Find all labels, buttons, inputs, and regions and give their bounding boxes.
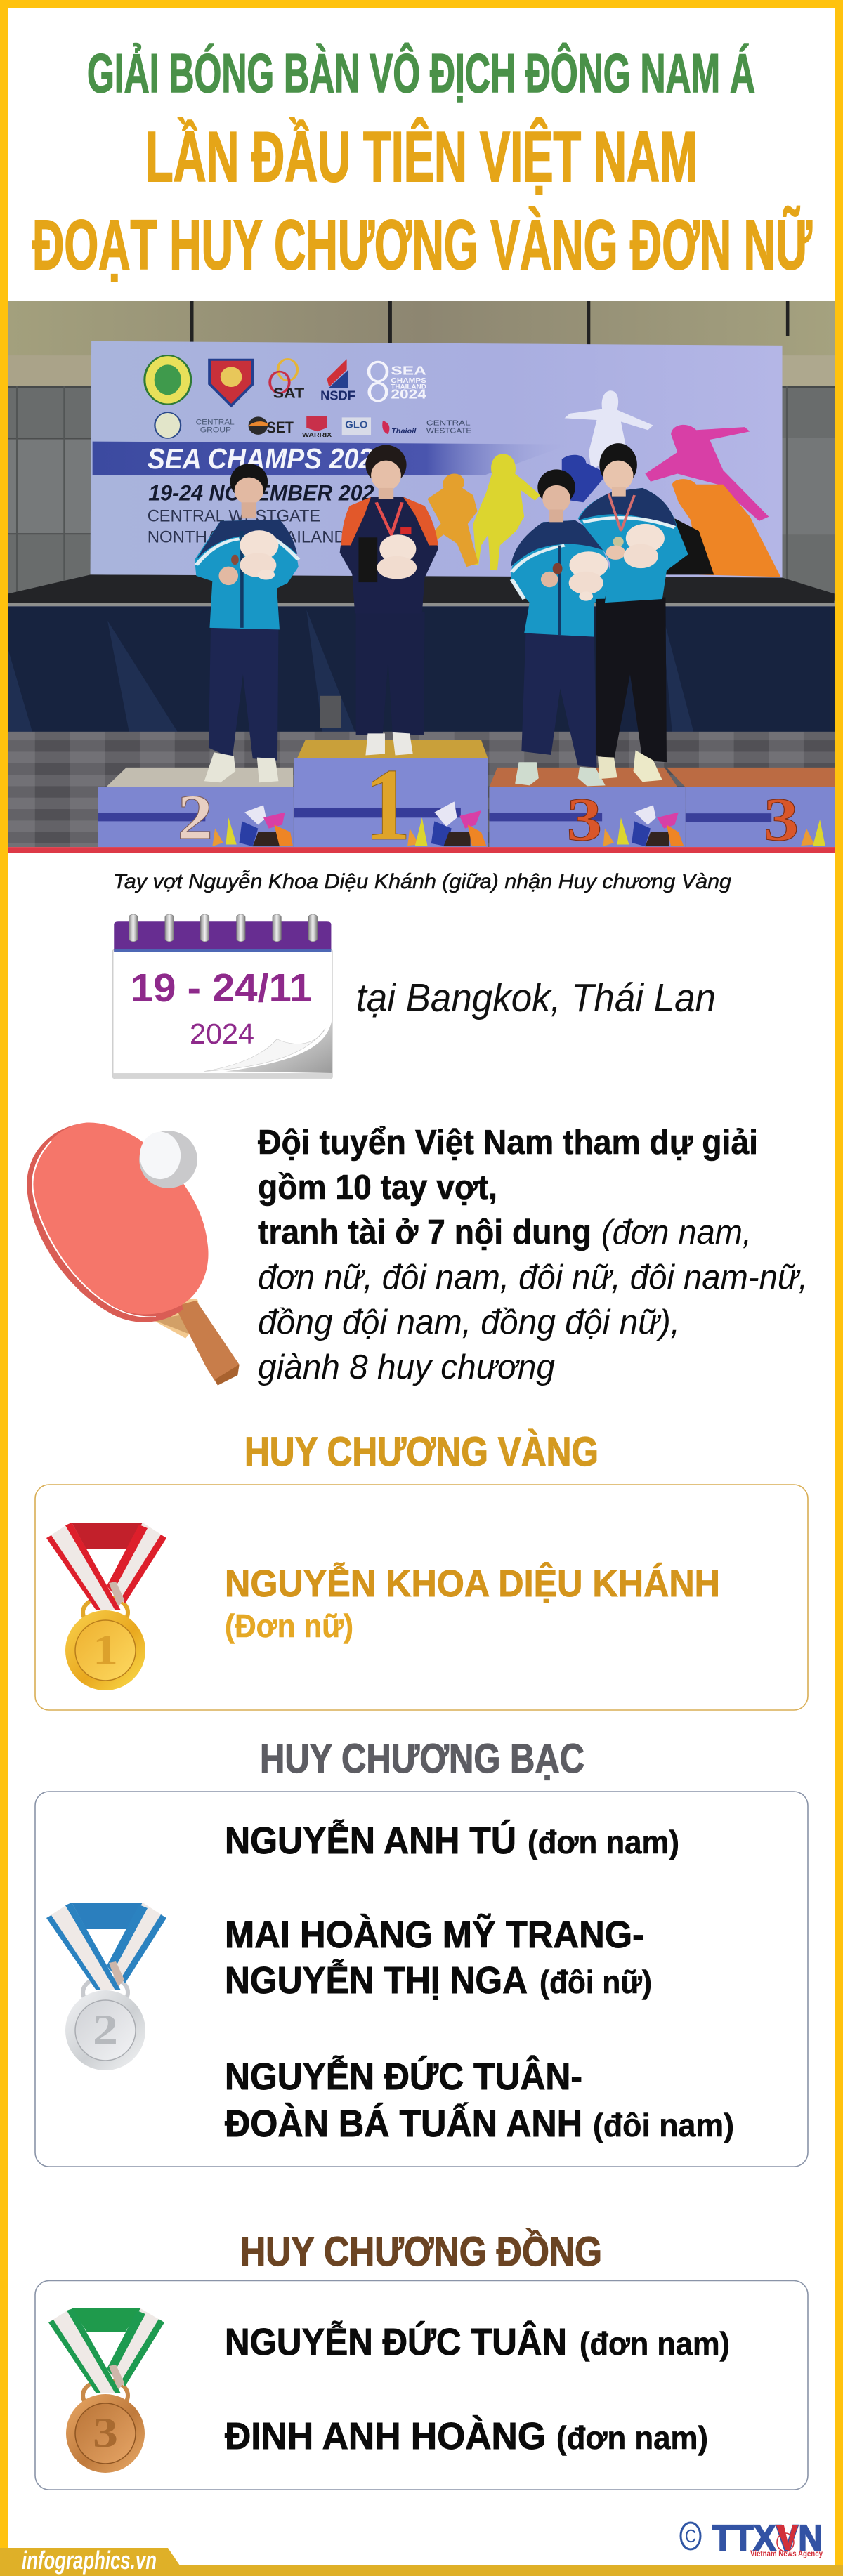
banner	[91, 341, 783, 578]
stage and curtain	[8, 574, 836, 732]
podium block 1: 1	[365, 747, 411, 862]
icon: gold medal: 1	[93, 1627, 118, 1673]
calendar icon	[113, 914, 332, 1079]
silver medalists: MAI HOÀNG MỸ TRANG-	[225, 1914, 644, 1956]
podium block 3: 3	[567, 785, 602, 854]
team description text: (đơn nam,	[601, 1214, 752, 1251]
podium block 3	[489, 768, 686, 854]
icon: gold medal	[46, 1523, 166, 1690]
podium block 2	[98, 768, 294, 853]
banner: GROUP	[200, 426, 231, 434]
banner: CENTRAL	[196, 418, 235, 427]
icon: bronze medal: 3	[93, 2410, 118, 2456]
title	[32, 42, 812, 284]
player: centre	[340, 445, 438, 756]
footer bar with site name	[0, 2546, 843, 2576]
team description text	[258, 1124, 808, 1386]
silver medalists: (đôi nam)	[593, 2107, 734, 2143]
silver medalists: (đôi nữ)	[540, 1964, 652, 2000]
wall and stage backdrop	[8, 300, 836, 601]
podium block 2: 2	[178, 782, 213, 853]
podium block 3 second	[667, 768, 836, 854]
silver medalists: ĐOÀN BÁ TUẤN ANH	[225, 2103, 582, 2145]
bronze medalists: NGUYỄN ĐỨC TUÂN	[225, 2320, 567, 2363]
player: right back	[578, 443, 688, 782]
silver medalists: (đơn nam)	[528, 1824, 679, 1860]
player: right front	[511, 469, 610, 786]
photo: podium ceremony	[8, 300, 836, 862]
heading: silver medal: HUY CHƯƠNG BẠC	[260, 1736, 584, 1782]
location text: tại Bangkok, Thái Lan	[356, 975, 716, 1020]
banner: WESTGATE	[426, 426, 471, 435]
floor	[8, 732, 836, 847]
icon: silver medal: 2	[93, 2006, 118, 2053]
banner: Thaioil	[391, 427, 417, 435]
banner: 19-24 NOVEMBER 202	[148, 480, 374, 506]
team description text: giành 8 huy chương	[258, 1348, 555, 1386]
banner: CENTRAL WESTGATE	[148, 506, 320, 525]
banner: GLO	[345, 419, 367, 431]
player: left	[195, 464, 299, 782]
banner: NSDF	[320, 388, 355, 402]
banner: CENTRAL	[426, 419, 471, 427]
silver medalists: NGUYỄN ANH TÚ	[225, 1819, 516, 1862]
team description text: đồng đội nam, đồng đội nữ),	[258, 1303, 680, 1341]
banner: 2024	[391, 387, 426, 401]
podium block 1	[294, 740, 488, 847]
banner: NONTHABURI THAILAND	[148, 527, 346, 546]
calendar icon: 19 - 24/11	[131, 966, 312, 1011]
banner: CHAMPS	[391, 376, 426, 384]
banner: SEA CHAMPS 202	[148, 443, 373, 475]
panel: bronze medal	[35, 2281, 808, 2490]
team description text: đơn nữ, đôi nam, đôi nữ, đôi nam-nữ,	[258, 1259, 808, 1296]
icon: bronze medal	[48, 2308, 164, 2473]
banner silhouettes	[426, 390, 780, 577]
team description text: tranh tài ở 7 nội dung	[258, 1214, 592, 1251]
silver medalists	[225, 1819, 734, 2145]
logo: TTXVN: TTXVN	[712, 2518, 823, 2558]
bronze medalists	[225, 2320, 730, 2457]
banner: THAILAND	[391, 383, 426, 390]
banner: SAT	[273, 384, 304, 401]
banner: SEA	[391, 364, 426, 378]
bronze medalists: (đơn nam)	[580, 2325, 730, 2362]
banner: WARRIX	[302, 433, 332, 438]
photo caption: Tay vợt Nguyễn Khoa Diệu Khánh (giữa) nhận Huy chương Vàng	[113, 870, 731, 893]
heading: bronze medal: HUY CHƯƠNG ĐỒNG	[240, 2229, 602, 2275]
bronze medalists: (đơn nam)	[556, 2419, 708, 2456]
icon: table tennis paddle and ball	[27, 1122, 240, 1385]
event: (Đơn nữ)	[225, 1608, 353, 1644]
footer bar with site name: infographics.vn	[22, 2546, 157, 2575]
winner name: NGUYỄN KHOA DIỆU KHÁNH	[225, 1562, 720, 1605]
team description text: gồm 10 tay vợt,	[258, 1169, 497, 1207]
team description text: Đội tuyển Việt Nam tham dự giải	[258, 1124, 758, 1162]
logo: TTXVN: Vietnam News Agency	[750, 2549, 823, 2558]
podium block 3 second: 3	[764, 785, 799, 854]
heading: gold medal: HUY CHƯƠNG VÀNG	[244, 1429, 599, 1475]
bronze medalists: ĐINH ANH HOÀNG	[225, 2415, 546, 2457]
logo: TTXVN: C	[685, 2525, 696, 2547]
panel: silver medal	[35, 1792, 808, 2167]
panel: gold medal	[35, 1485, 808, 1710]
calendar icon: 2024	[190, 1018, 254, 1050]
silver medalists: NGUYỄN ĐỨC TUÂN-	[225, 2055, 582, 2098]
banner: SET	[267, 419, 294, 437]
icon: silver medal	[46, 1903, 166, 2070]
silver medalists: NGUYỄN THỊ NGA	[225, 1959, 528, 2002]
red floor strip	[8, 847, 835, 853]
